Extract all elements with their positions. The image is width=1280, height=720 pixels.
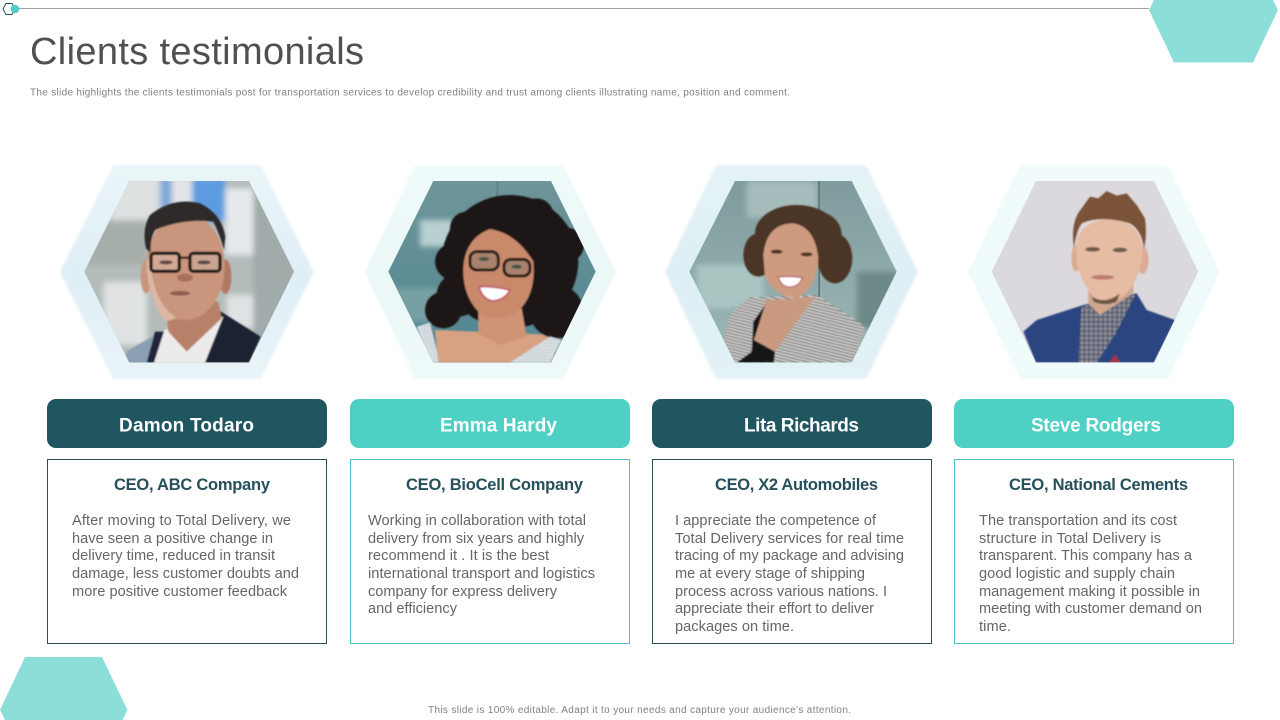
- testimonial card: Emma Hardy: company for express delivery: [368, 584, 558, 600]
- testimonial card: Damon Todaro: CEO, ABC Company: [114, 476, 271, 494]
- testimonial card: Lita Richards: Total Delivery services for real time: [675, 531, 904, 547]
- testimonial card: Lita Richards: tracing of my package and advising: [675, 548, 904, 564]
- name bar: Emma Hardy: [350, 399, 630, 448]
- testimonial card: Damon Todaro: have seen a positive change in: [72, 531, 273, 547]
- testimonial card: Lita Richards: process across various nations. I: [675, 584, 887, 600]
- testimonial card: Lita Richards: I appreciate the competence of: [675, 513, 877, 529]
- subtitle: The slide highlights the clients testimonials post for transportation services to develop credibility and trust among clients illustrating name, position and comment.: [30, 88, 790, 98]
- decorative hexagon: top right: [1149, 0, 1278, 62]
- name bar: Damon Todaro: [47, 399, 327, 448]
- testimonial card: Lita Richards: packages on time.: [675, 619, 794, 635]
- panel: Damon Todaro: [47, 165, 327, 644]
- portrait: Lita Richards: [683, 178, 903, 365]
- testimonial card: Lita Richards: CEO, X2 Automobiles: [715, 476, 878, 494]
- testimonial card: Damon Todaro: more positive customer feedback: [72, 584, 288, 600]
- testimonial card: Emma Hardy: [350, 460, 630, 644]
- testimonial card: Steve Rodgers: management making it possible in: [979, 584, 1200, 600]
- name bar: Emma Hardy: Emma Hardy: [440, 416, 557, 436]
- testimonial card: Steve Rodgers: transparent. This company has a: [979, 548, 1193, 564]
- name bar: Lita Richards: [652, 399, 932, 448]
- panel: Emma Hardy: [350, 165, 630, 644]
- panel: Steve Rodgers: [954, 165, 1234, 644]
- portrait: Steve Rodgers: [983, 178, 1203, 365]
- portrait: Emma Hardy: [383, 178, 600, 365]
- panel: Lita Richards: [652, 165, 932, 644]
- testimonial card: Steve Rodgers: meeting with customer demand on: [979, 601, 1202, 617]
- testimonial card: Steve Rodgers: [954, 460, 1234, 644]
- testimonial card: Damon Todaro: [48, 460, 326, 644]
- testimonial card: Emma Hardy: CEO, BioCell Company: [406, 476, 584, 494]
- footer note: This slide is 100% editable. Adapt it to your needs and capture your audience's attention.: [428, 705, 851, 716]
- decorative hexagon: bottom left: [0, 657, 128, 720]
- portrait frame: Damon Todaro: [60, 165, 314, 379]
- portrait frame: Emma Hardy: [365, 165, 616, 379]
- portrait frame: Lita Richards: [665, 165, 918, 379]
- testimonial card: Emma Hardy: Working in collaboration with total: [368, 513, 586, 529]
- portrait: Damon Todaro: [80, 178, 297, 365]
- name bar: Steve Rodgers: Steve Rodgers: [1031, 416, 1161, 436]
- name bar: Lita Richards: Lita Richards: [744, 416, 859, 436]
- title: Clients testimonials: [30, 31, 364, 73]
- testimonial card: Damon Todaro: After moving to Total Delivery, we: [72, 513, 291, 529]
- testimonial card: Damon Todaro: damage, less customer doubts and: [72, 566, 299, 582]
- testimonial card: Steve Rodgers: time.: [979, 619, 1011, 635]
- top connector line with small hexagon: [3, 4, 1149, 14]
- testimonial card: Lita Richards: [652, 460, 932, 644]
- testimonial card: Emma Hardy: international transport and logistics: [368, 566, 595, 582]
- testimonial card: Lita Richards: appreciate their effort to deliver: [675, 601, 874, 617]
- testimonial card: Steve Rodgers: structure in Total Delivery is: [979, 531, 1161, 547]
- testimonial card: Steve Rodgers: The transportation and its cost: [979, 513, 1177, 529]
- testimonial card: Emma Hardy: delivery from six years and highly: [368, 531, 585, 547]
- name bar: Steve Rodgers: [954, 399, 1234, 448]
- testimonial card: Steve Rodgers: CEO, National Cements: [1009, 476, 1188, 494]
- testimonial card: Emma Hardy: recommend it . It is the best: [368, 548, 549, 564]
- testimonial card: Lita Richards: me at every stage of shipping: [675, 566, 865, 582]
- testimonial card: Damon Todaro: delivery time, reduced in transit: [72, 548, 275, 564]
- name bar: Damon Todaro: Damon Todaro: [119, 416, 254, 436]
- testimonial card: Emma Hardy: and efficiency: [368, 601, 458, 617]
- testimonial card: Steve Rodgers: good logistic and supply chain: [979, 566, 1175, 582]
- portrait frame: Steve Rodgers: [968, 165, 1220, 379]
